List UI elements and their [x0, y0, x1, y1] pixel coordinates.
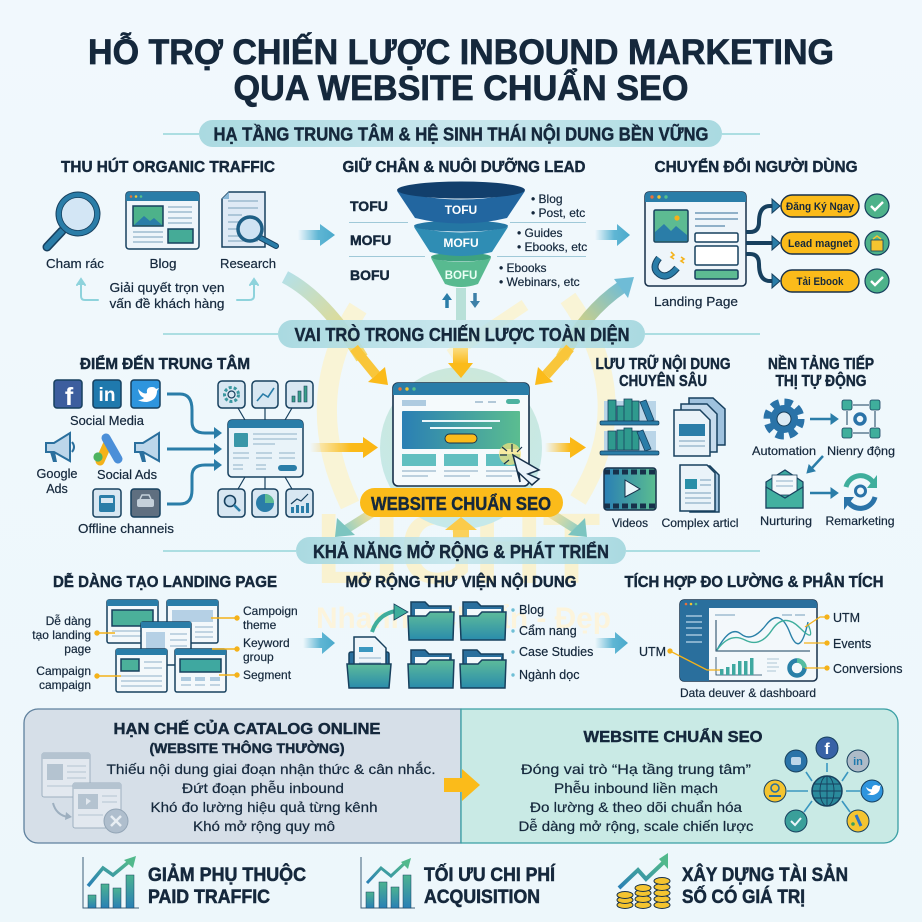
section heading: role: VAI TRÒ TRONG CHIẾN LƯỢC TOÀN DIỆN	[294, 324, 630, 345]
labels: attract icons: Blog	[150, 257, 177, 271]
funnel stage labels: BOFU	[350, 267, 390, 283]
button: register now: Đăng Ký Ngay	[786, 201, 854, 213]
panel: catalog limitations: Thiếu nội dung giai đoạn nhận thức & cân nhắc.	[106, 761, 436, 777]
labels: nurturing and remarketing: Remarketing	[826, 514, 894, 528]
heading: create landing pages: DỄ DÀNG TẠO LANDING PAGE	[53, 572, 277, 591]
section heading: infrastructure: HẠ TẦNG TRUNG TÂM & HỆ SINH THÁI NỘI DUNG BỀN VỮNG	[214, 124, 708, 144]
watermark logo: LIGHT	[316, 493, 600, 605]
labels: analytics: UTM	[833, 611, 860, 625]
labels: landing left: Campaign	[36, 664, 91, 678]
labels: automation	[752, 444, 895, 458]
icons: social media	[54, 380, 160, 411]
watermark logo	[316, 298, 611, 635]
benefit: optimize acquisition cost: TỐI ƯU CHI PHÍ	[424, 864, 556, 886]
panel: seo website benefits: Đo lường & theo dõi chuẩn hóa	[530, 799, 742, 815]
benefit: reduce paid traffic dependence: GIẢM PHỤ THUỘC	[148, 864, 306, 886]
icon: main folder with document	[347, 637, 391, 688]
icon: network globe: f	[824, 741, 830, 758]
labels: analytics: UTM	[639, 645, 666, 659]
funnel feedback arrows	[442, 288, 480, 320]
yellow leader lines	[95, 616, 239, 678]
heading: measurement and analysis: TÍCH HỢP ĐO LƯỜNG & PHÂN TÍCH	[624, 572, 884, 591]
icon: video player	[604, 468, 656, 510]
list: library categories: Case Studies	[519, 645, 593, 659]
funnel stage labels	[349, 198, 586, 283]
labels: landing right	[243, 604, 298, 682]
panel: catalog limitations: Khó đo lường hiệu quả từng kênh	[150, 799, 378, 815]
icon: workflow	[842, 400, 880, 438]
labels: analytics	[639, 611, 902, 700]
list: library categories: Cẩm nang	[519, 624, 577, 638]
heading: nurture lead: GIỮ CHÂN & NUÔI DƯỠNG LEAD	[342, 156, 586, 176]
funnel content lists: • Webinars, etc	[499, 275, 580, 289]
icons: library folders	[408, 602, 506, 688]
panel: seo website benefits: Phễu inbound liền mạch	[554, 780, 718, 796]
icon: magnifier	[47, 192, 100, 247]
labels: analytics: Conversions	[833, 662, 902, 676]
labels: ads channels: Google	[36, 467, 78, 481]
button: lead magnet: Lead magnet	[788, 238, 852, 250]
funnel content lists: • Blog	[531, 192, 563, 206]
heading: organic traffic: THU HÚT ORGANIC TRAFFIC	[61, 157, 275, 176]
panel: catalog limitations: (WEBSITE THÔNG THƯỜNG)	[150, 741, 344, 756]
funnel content lists	[499, 192, 587, 289]
icon: article document	[680, 465, 719, 512]
icons: social media: f	[65, 383, 74, 411]
arrow: nurture to convert	[595, 224, 630, 246]
heading: marketing automation: THỊ TỰ ĐỘNG	[776, 371, 866, 390]
labels: landing left: tạo landing	[32, 628, 91, 642]
funnel stage labels: MOFU	[350, 232, 391, 248]
sweeping arcs around hub	[285, 277, 634, 529]
section heading: role	[163, 320, 760, 348]
hub small page with tool icons	[218, 381, 313, 517]
icon: network globe: in	[853, 756, 863, 768]
small return arrows	[77, 279, 258, 300]
panel: seo website benefits: WEBSITE CHUẨN SEO	[584, 727, 762, 746]
labels: landing left: page	[64, 642, 91, 656]
labels: ads channels	[36, 467, 157, 496]
labels: automation: Nienry động	[827, 444, 895, 458]
funnel: MOFU	[443, 236, 479, 250]
watermark logo: Nhanh - Chuẩn - Đẹp	[316, 602, 611, 635]
section heading: scalability: KHẢ NĂNG MỞ RỘNG & PHÁT TRIỂN	[313, 541, 609, 562]
label: social media: Social Media	[70, 414, 144, 428]
panel: seo website benefits: Đóng vai trò “Hạ tầng trung tâm”	[521, 761, 751, 777]
funnel content lists: • Guides	[517, 226, 563, 240]
panel: seo website benefits: Dễ dàng mở rộng, scale chiến lược	[518, 818, 754, 834]
icon: blog window	[126, 192, 199, 249]
landing page mockup	[645, 192, 746, 286]
arrow: website to storage	[545, 437, 586, 458]
funnel content lists: • Ebooks	[499, 261, 547, 275]
text: solve customer problems: vấn đề khách hàng	[110, 296, 224, 311]
text: solve customer problems: Giải quyết trọn vẹn	[110, 280, 224, 295]
labels: storage items: Complex articl	[662, 516, 738, 530]
labels: attract icons	[46, 257, 276, 271]
text: solve customer problems	[110, 280, 224, 311]
comparison panel	[24, 709, 898, 843]
benefit: build digital assets: XÂY DỰNG TÀI SẢN	[682, 864, 848, 886]
badge: website chuan seo	[360, 488, 563, 517]
labels: analytics: Data deuver & dashboard	[680, 686, 816, 700]
badge: website chuan seo: WEBSITE CHUẨN SEO	[371, 493, 551, 514]
arrow: catalog to seo website	[444, 769, 480, 801]
funnel content lists: • Post, etc	[531, 206, 585, 220]
icon: bookshelf	[600, 399, 659, 455]
labels: landing right: Campoign	[243, 604, 298, 618]
labels: storage items	[612, 516, 738, 530]
panel: catalog limitations: Khó mở rộng quy mô	[193, 818, 335, 834]
benefit: reduce paid traffic dependence: PAID TRAFFIC	[148, 887, 270, 908]
main title: QUA WEBSITE CHUẨN SEO	[234, 68, 688, 108]
labels: landing right: theme	[243, 618, 277, 632]
branching conversion arrows	[746, 199, 780, 288]
automation flow arrows	[807, 414, 838, 498]
icon: cursor click	[499, 443, 539, 485]
button: download ebook	[781, 270, 859, 292]
labels: landing left: Dễ dàng	[46, 613, 91, 628]
labels: landing right: Segment	[243, 668, 292, 682]
benefit: optimize acquisition cost	[361, 857, 556, 908]
arrows: channels to hub page	[167, 394, 222, 504]
arrow: document to folders	[372, 604, 408, 632]
labels: automation: Automation	[752, 444, 816, 458]
heading: marketing automation	[768, 354, 874, 390]
label: landing page: Landing Page	[654, 294, 738, 309]
heading: convert users: CHUYỂN ĐỔI NGƯỜI DÙNG	[654, 157, 858, 176]
central website mockup	[393, 383, 529, 486]
labels: storage items: Videos	[612, 516, 648, 530]
main title	[88, 32, 834, 108]
heading: central destination: ĐIỂM ĐẾN TRUNG TÂM	[80, 354, 250, 373]
labels: analytics: Events	[833, 637, 871, 651]
dashboard	[680, 600, 817, 681]
heading: marketing automation: NỀN TẢNG TIẾP	[768, 354, 874, 373]
funnel	[397, 182, 525, 287]
labels: landing left: campaign	[39, 678, 91, 692]
arrow: attract to nurture	[298, 224, 335, 246]
list: library categories: Blog	[519, 603, 544, 617]
heading: deep content storage: CHUYÊN SÂU	[619, 371, 707, 390]
icons: ads channels	[46, 433, 159, 462]
icon: stacked documents	[674, 398, 725, 456]
benefit: optimize acquisition cost: ACQUISITION	[424, 887, 540, 908]
label: offline channels: Offline channeis	[78, 522, 174, 536]
funnel content lists: • Ebooks, etc	[517, 240, 587, 254]
funnel: TOFU	[445, 203, 477, 217]
icon: network globe	[764, 737, 883, 832]
benefit: build digital assets: SỐ CÓ GIÁ TRỊ	[682, 886, 805, 908]
funnel stage labels: TOFU	[350, 198, 388, 214]
panel: catalog limitations: HẠN CHẾ CỦA CATALOG ONLINE	[114, 719, 381, 738]
labels: landing left	[32, 613, 91, 692]
button: lead magnet	[781, 232, 859, 254]
list: library categories: Ngành dọc	[519, 668, 579, 682]
icons: conversion status	[865, 194, 889, 293]
section heading: scalability	[163, 537, 760, 564]
button: download ebook: Tải Ebook	[796, 276, 844, 288]
icon: nurturing envelope	[766, 470, 803, 508]
heading: deep content storage: LƯU TRỮ NỘI DUNG	[596, 353, 730, 373]
labels: landing right: group	[243, 650, 274, 664]
arrow: landing to library	[303, 632, 335, 654]
labels: landing right: Keyword	[243, 636, 290, 650]
icon: automation gear	[767, 402, 801, 436]
labels: attract icons: Research	[220, 257, 276, 271]
icon: research document	[222, 192, 276, 247]
panel: seo website benefits	[461, 709, 898, 843]
landing page windows group	[107, 600, 226, 692]
benefit: reduce paid traffic dependence	[83, 856, 306, 908]
dashboard leader lines	[668, 615, 829, 670]
labels: nurturing and remarketing	[760, 514, 894, 528]
benefit: build digital assets	[617, 853, 848, 908]
section heading: infrastructure	[163, 120, 760, 147]
panel: catalog limitations	[24, 709, 461, 843]
heading: expand content library: MỞ RỘNG THƯ VIỆN NỘI DUNG	[346, 572, 576, 591]
heading: deep content storage	[596, 353, 730, 390]
list: library categories	[511, 603, 593, 682]
labels: attract icons: Cham rác	[46, 257, 104, 271]
arrow: library to analytics	[595, 632, 628, 654]
icon: remarketing cycle	[844, 475, 877, 510]
arrow: hub page to website	[310, 437, 378, 458]
icons: social media: in	[99, 385, 115, 406]
main title: HỖ TRỢ CHIẾN LƯỢC INBOUND MARKETING	[88, 32, 834, 72]
button: register now	[781, 195, 859, 217]
panel: catalog limitations: Đứt đoạn phễu inbound	[182, 780, 344, 796]
arrows: website to scalable section	[335, 513, 587, 538]
icon: faded catalog windows	[42, 753, 128, 833]
icons: offline channels	[93, 489, 160, 517]
labels: nurturing and remarketing: Nurturing	[760, 514, 812, 528]
arrows: strategy into website	[354, 348, 570, 385]
labels: ads channels: Social Ads	[97, 468, 157, 482]
funnel: BOFU	[445, 270, 477, 282]
labels: ads channels: Ads	[46, 482, 68, 496]
